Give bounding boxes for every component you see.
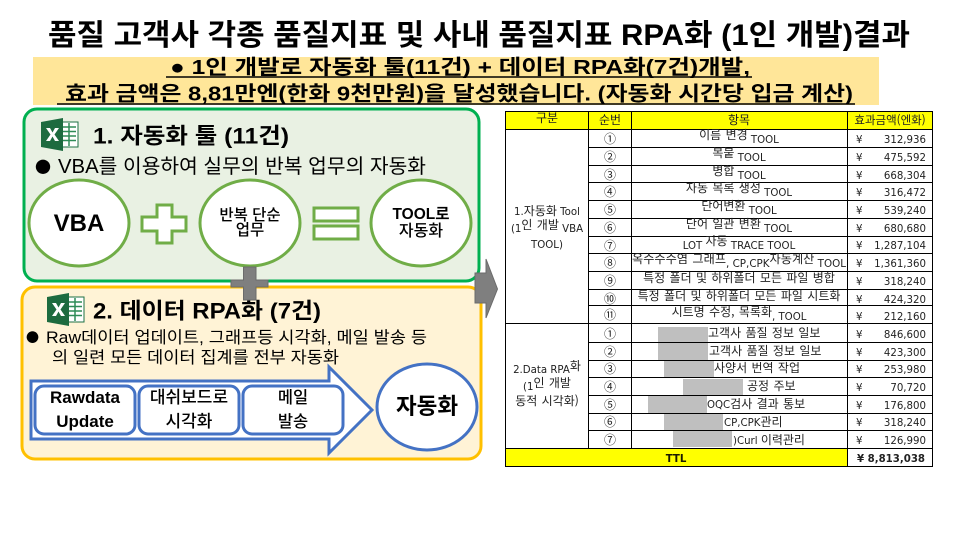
table header: 구분 — [536, 109, 558, 126]
sequence numbers: ⑥ — [604, 219, 616, 236]
item names: TRACE TOOL — [728, 241, 796, 252]
item names: 단어 일관 변환 — [686, 215, 761, 232]
amounts: 253,980 — [884, 365, 926, 376]
amounts: ¥ — [856, 295, 863, 306]
step: dashboard: 시각화 — [166, 412, 213, 431]
circle: VBA: VBA — [54, 210, 104, 237]
circle: tool automation: TOOL로 — [392, 206, 450, 223]
bullet text: ● — [26, 327, 39, 346]
summary band: ● 1인 개발로 자동화 툴(11건) + 데이터 RPA화(7건)개발, — [170, 56, 750, 79]
item names — [632, 126, 846, 448]
amounts: ¥ — [856, 401, 863, 412]
group label: automation tools — [511, 202, 583, 251]
group label: data RPA: 화 — [570, 357, 581, 374]
circle: automation — [377, 364, 477, 450]
icon: excel — [41, 118, 78, 151]
amounts: ¥ — [856, 312, 863, 323]
sequence numbers: ⑥ — [604, 413, 616, 430]
total row: TTL — [666, 454, 687, 465]
item names: 사양서 번역 작업 — [714, 359, 800, 376]
item names: 옥수수수염 그래프 — [632, 250, 726, 267]
table header: 항목 — [728, 111, 750, 128]
amounts: ¥ — [856, 436, 863, 447]
item names: 고객사 품질 정보 일보 — [708, 324, 820, 341]
amounts: ¥ — [856, 188, 863, 199]
summary band: 효과 금액은 8,81만엔(한화 9천만원)을 달성했습니다. (자동화 시간당 입금 계산) — [65, 82, 853, 106]
group label: data RPA: (1 — [523, 382, 533, 393]
sequence numbers: ⑤ — [604, 396, 616, 413]
item names: 병합 — [712, 162, 734, 179]
icon: grey plus connector — [231, 267, 268, 300]
amounts: ¥ — [856, 330, 863, 341]
item names: TOOL — [734, 153, 766, 164]
amounts: ¥ — [856, 153, 863, 164]
bullet text: ● — [35, 154, 51, 178]
item names: 특정 폴더 및 하위폴더 모든 파일 시트화 — [638, 287, 840, 304]
step: dashboard: 대쉬보드로 — [150, 388, 228, 407]
item names: 이름 변경 — [699, 126, 748, 143]
amounts: ¥ — [856, 224, 863, 235]
amounts: ¥ — [856, 365, 863, 376]
table header: 순번 — [599, 111, 621, 128]
table grid — [506, 112, 932, 466]
amounts: ¥ — [856, 135, 863, 146]
sequence numbers: ⑩ — [604, 290, 616, 307]
amounts: 1,361,360 — [874, 259, 926, 270]
item names: 시트명 수정, 목록화 — [672, 303, 772, 320]
step: dashboard — [139, 386, 239, 434]
item names: TOOL — [761, 224, 792, 235]
icon: equals — [314, 208, 358, 239]
circle: repetitive work — [200, 180, 300, 266]
sequence numbers: ③ — [604, 166, 616, 183]
item names: 공정 주보 — [747, 377, 796, 394]
amounts: 312,936 — [884, 135, 926, 146]
amounts: ¥ — [856, 241, 863, 252]
group label: automation tools: (1 — [511, 224, 521, 235]
item names: 복붙 — [712, 144, 734, 161]
amounts: 680,680 — [884, 224, 926, 235]
heading: automation tools: 1. 자동화 툴 (11건) — [93, 124, 289, 148]
item names: CP,CPK관리 — [724, 413, 783, 430]
amounts: 668,304 — [884, 171, 926, 182]
bullet text — [26, 327, 427, 367]
item names: 자동 — [706, 232, 728, 249]
amounts: ¥ — [856, 277, 863, 288]
total row — [666, 454, 925, 465]
step: mail — [243, 386, 343, 434]
group label: automation tools: 1.자동화 Tool — [514, 202, 580, 219]
item names: , CP,CPK — [726, 259, 770, 270]
arrow: to table — [475, 259, 498, 318]
amounts: 539,240 — [884, 206, 926, 217]
sequence numbers: ⑦ — [604, 431, 616, 448]
step: rawdata update: Rawdata — [50, 388, 120, 407]
item names: TOOL — [748, 135, 779, 146]
sequence numbers: ③ — [604, 360, 616, 377]
icon: plus — [142, 205, 186, 243]
step: mail: 메일 — [278, 388, 308, 407]
table header — [506, 109, 932, 130]
group label: automation tools: TOOL) — [530, 240, 563, 251]
item names: OQC검사 결과 통보 — [707, 395, 805, 412]
amounts: 475,592 — [884, 153, 926, 164]
item names: 자동계산 — [770, 250, 814, 267]
amounts: 846,600 — [884, 330, 926, 341]
table header: 효과금액(엔화) — [854, 112, 926, 128]
step: rawdata update — [35, 386, 135, 434]
amounts: 318,240 — [884, 418, 926, 429]
item names: TOOL — [814, 259, 846, 270]
group label: automation tools: 인 개발 — [521, 216, 559, 233]
circle: automation: 자동화 — [396, 394, 458, 419]
panel: automation tools — [24, 109, 479, 281]
group label: data RPA: 2.Data RPA — [513, 365, 570, 376]
amounts: 423,300 — [884, 348, 926, 359]
summary band — [33, 56, 879, 106]
circle: tool automation: 자동화 — [399, 222, 443, 240]
amounts: ¥ — [856, 418, 863, 429]
sequence numbers: ② — [604, 343, 616, 360]
amounts: 126,990 — [884, 436, 926, 447]
step: rawdata update: Update — [56, 412, 114, 431]
bullet text: Raw데이터 업데이트, 그래프등 시각화, 메일 발송 등 — [46, 328, 427, 347]
item names: )Curl 이력관리 — [733, 431, 805, 448]
sequence numbers: ⑧ — [604, 254, 616, 271]
item names: TOOL — [761, 188, 792, 199]
amounts: 316,472 — [884, 188, 926, 199]
item names: 단어변환 — [701, 197, 745, 214]
amounts: 1,287,104 — [874, 241, 926, 252]
item names: 특정 폴더 및 하위폴더 모든 파일 병합 — [643, 269, 835, 286]
group label: data RPA: 동적 시각화) — [515, 392, 579, 409]
amounts: ¥ — [856, 383, 863, 394]
sequence numbers: ① — [604, 130, 616, 147]
arrow: process flow — [31, 367, 372, 453]
amounts: 70,720 — [890, 383, 926, 394]
sequence numbers: ④ — [604, 183, 616, 200]
sequence numbers: ② — [604, 148, 616, 165]
circle: VBA — [29, 180, 129, 266]
title: 품질 고객사 각종 품질지표 및 사내 품질지표 RPA화 (1인 개발)결과 — [48, 19, 910, 52]
circle: tool automation — [371, 180, 471, 266]
group label: automation tools: VBA — [559, 224, 583, 235]
amounts: ¥ — [856, 171, 863, 182]
group label: data RPA: 인 개발 — [533, 374, 571, 391]
amounts: 176,800 — [884, 401, 926, 412]
item names: LOT — [683, 241, 702, 252]
panel: data RPA — [22, 287, 481, 459]
amounts: 318,240 — [884, 277, 926, 288]
amounts: 212,160 — [884, 312, 926, 323]
item names: 자동 목록 생성 — [686, 179, 761, 196]
sequence numbers: ④ — [604, 378, 616, 395]
amounts — [856, 135, 926, 447]
sequence numbers: ⑨ — [604, 272, 616, 289]
amounts: ¥ — [856, 206, 863, 217]
table: effect amounts — [506, 109, 932, 466]
sequence numbers — [604, 130, 616, 448]
circle: repetitive work: 반복 단순 — [219, 206, 281, 224]
total row: ¥ 8,813,038 — [857, 454, 925, 465]
icon: excel — [47, 293, 84, 326]
sequence numbers: ⑤ — [604, 201, 616, 218]
heading: data RPA: 2. 데이터 RPA화 (7건) — [93, 298, 321, 324]
amounts: 424,320 — [884, 295, 926, 306]
circle: repetitive work: 업무 — [236, 221, 264, 239]
group label: data RPA — [513, 357, 581, 409]
item names: TOOL — [734, 171, 766, 182]
table total row fill — [506, 448, 848, 466]
bullet text: 의 일련 모든 데이터 집계를 전부 자동화 — [52, 348, 339, 367]
item names: 고객사 품질 정보 일보 — [709, 342, 821, 359]
step: mail: 발송 — [278, 412, 308, 431]
item names: TOOL — [745, 206, 777, 217]
amounts: ¥ — [856, 348, 863, 359]
item names: , TOOL — [772, 312, 807, 323]
bullet text: VBA를 이용하여 실무의 반복 업무의 자동화 — [58, 155, 426, 178]
grey redaction blocks — [648, 327, 743, 447]
amounts: ¥ — [856, 259, 863, 270]
sequence numbers: ① — [604, 325, 616, 342]
sequence numbers: ⑪ — [604, 306, 616, 323]
sequence numbers: ⑦ — [604, 237, 616, 254]
